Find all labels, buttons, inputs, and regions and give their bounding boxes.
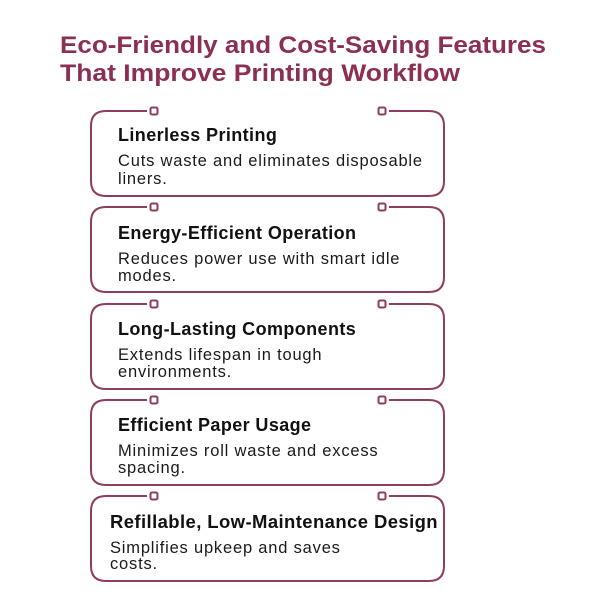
- card: Efficient Paper Usage: [91, 396, 444, 485]
- card: Refillable, Low-Maintenance Design: Simplifies upkeep and saves: [110, 539, 341, 557]
- card: Energy-Efficient Operation: Energy-Efficient Operation: [118, 223, 356, 243]
- card: Energy-Efficient Operation: [91, 204, 444, 292]
- card: Refillable, Low-Maintenance Design: costs.: [110, 555, 158, 573]
- card: Efficient Paper Usage: Minimizes roll waste and excess: [118, 442, 378, 460]
- card: Refillable, Low-Maintenance Design: [91, 492, 444, 581]
- card: Linerless Printing: [91, 108, 444, 196]
- card: Linerless Printing: Cuts waste and eliminates disposable: [118, 152, 423, 170]
- card: Refillable, Low-Maintenance Design: Refillable, Low-Maintenance Design: [110, 512, 438, 532]
- card: Linerless Printing: liners.: [118, 170, 168, 188]
- card: Linerless Printing: Linerless Printing: [118, 125, 277, 145]
- title: [60, 32, 546, 87]
- card: Long-Lasting Components: environments.: [118, 363, 232, 381]
- card: Energy-Efficient Operation: Reduces power use with smart idle: [118, 250, 400, 268]
- title: That Improve Printing Workflow: [60, 60, 460, 87]
- card: Energy-Efficient Operation: modes.: [118, 267, 177, 285]
- card: Long-Lasting Components: Long-Lasting Components: [118, 319, 356, 339]
- title: Eco-Friendly and Cost-Saving Features: [60, 32, 546, 59]
- card: Efficient Paper Usage: Efficient Paper Usage: [118, 415, 311, 435]
- card: Long-Lasting Components: Extends lifespan in tough: [118, 346, 322, 364]
- card: Long-Lasting Components: [91, 300, 444, 389]
- card: Efficient Paper Usage: spacing.: [118, 459, 186, 477]
